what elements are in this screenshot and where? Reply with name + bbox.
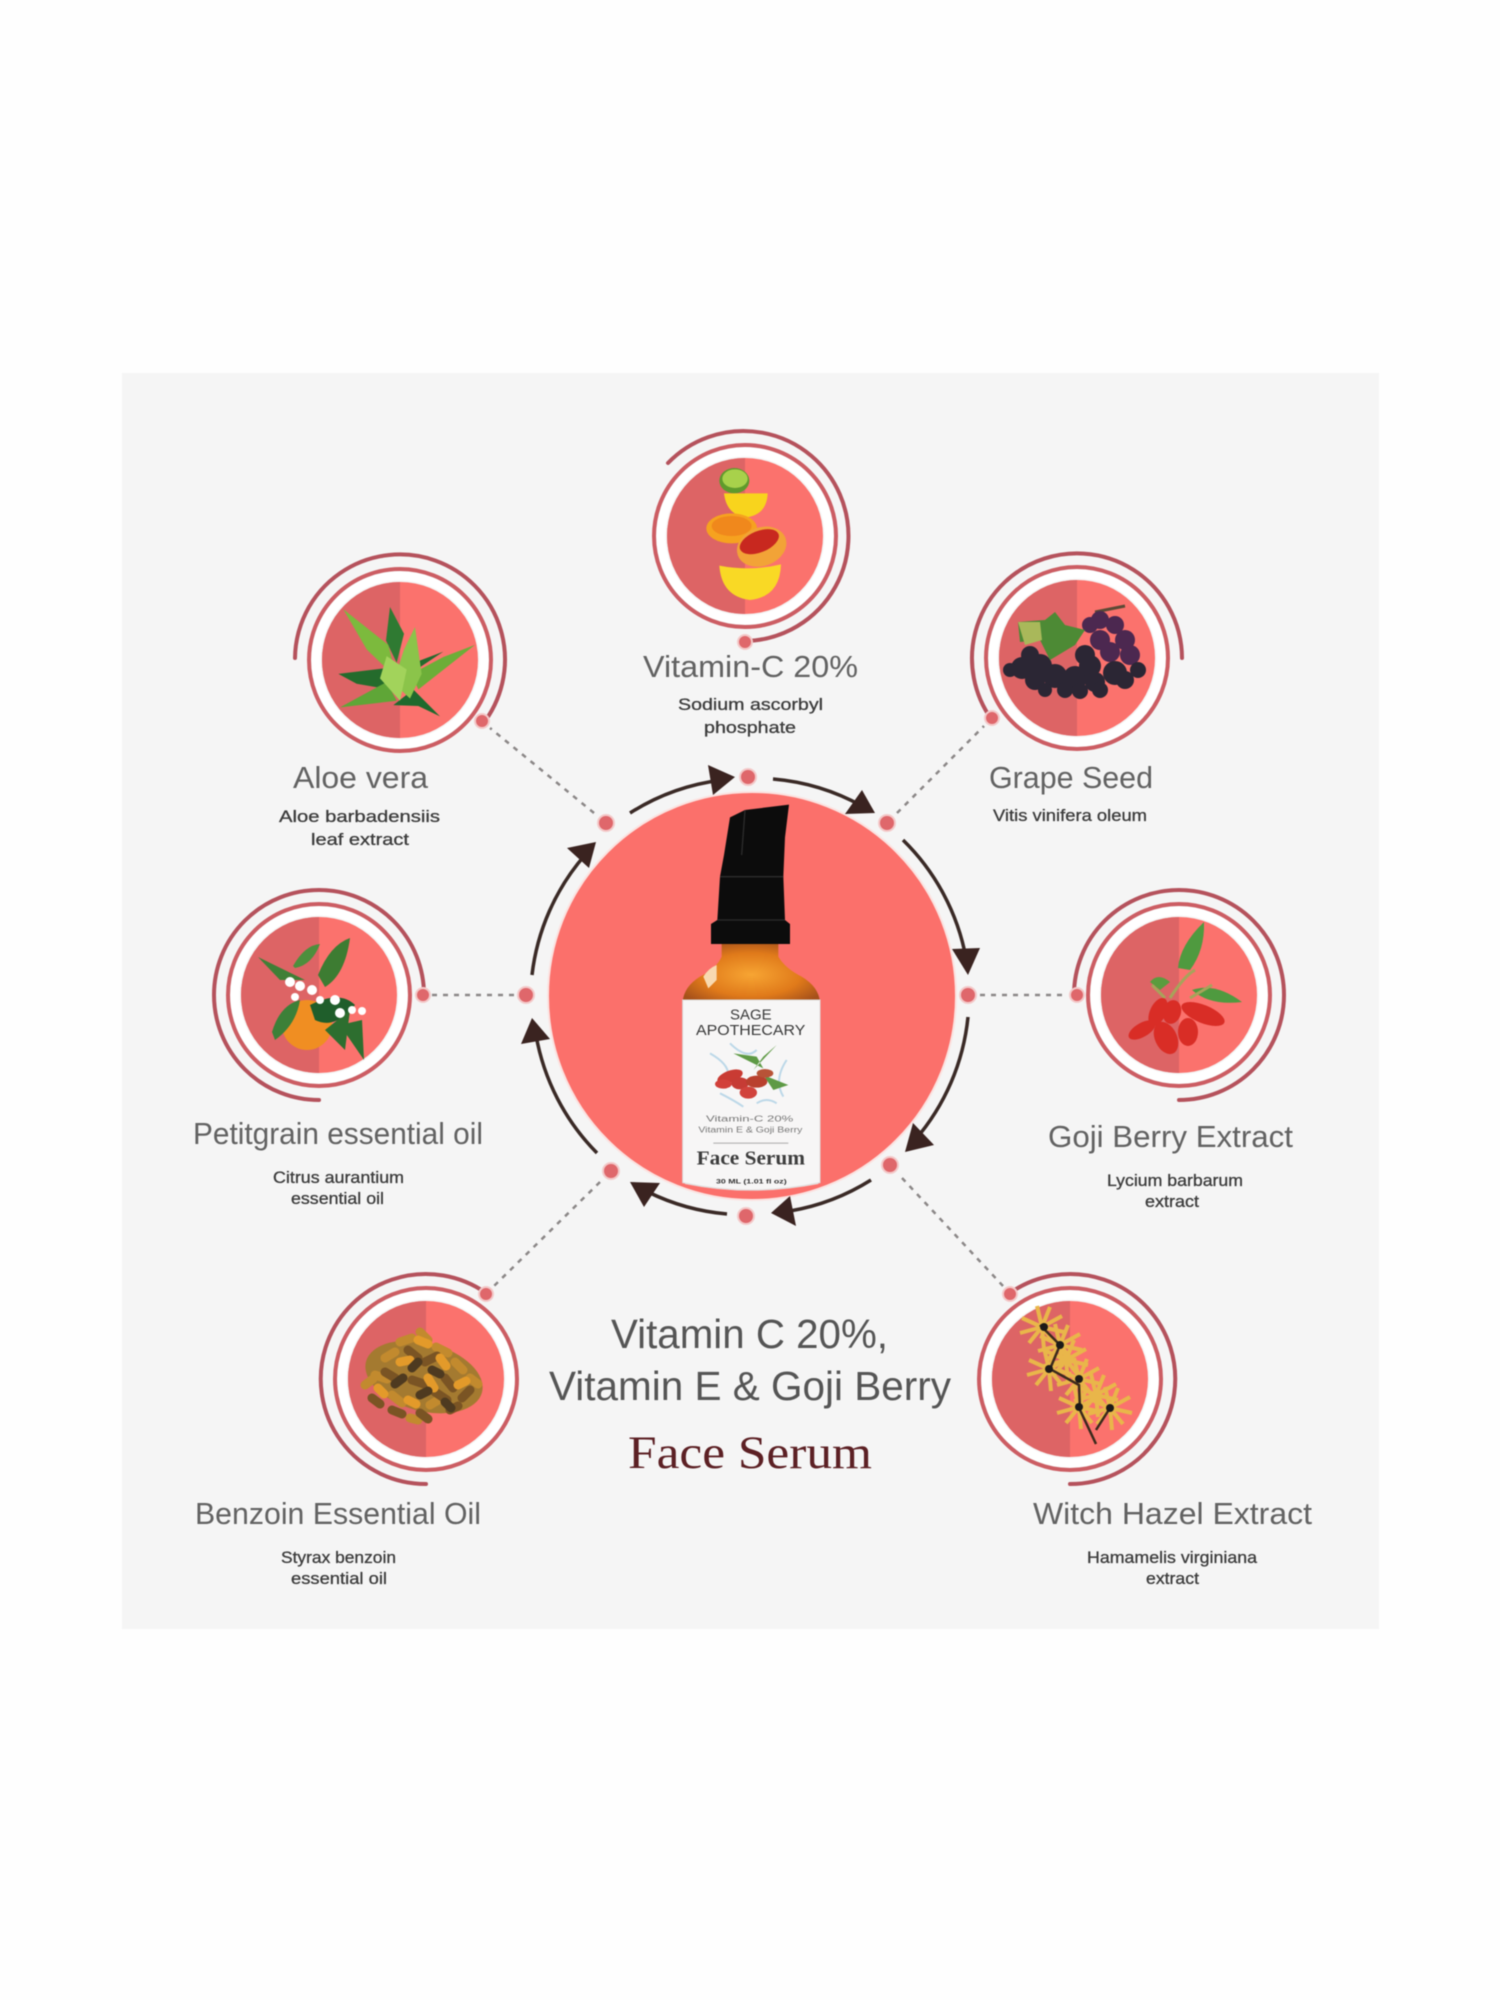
- label: Goji Berry Extract: Goji Berry Extract: [1048, 1119, 1293, 1154]
- medallion: benzoin: [321, 1274, 517, 1484]
- sublabel: phosphate: [704, 719, 796, 737]
- sublabel: Styrax benzoin: [281, 1549, 396, 1567]
- sublabel: [273, 1169, 404, 1208]
- sublabel: essential oil: [291, 1570, 387, 1588]
- sublabel: [1107, 1172, 1243, 1211]
- serum bottle: APOTHECARY: [696, 1023, 806, 1039]
- ingredient: Witch Hazel Extract: [979, 1274, 1312, 1588]
- sublabel: essential oil: [291, 1190, 384, 1208]
- icon: benzoin resin chips: [357, 1329, 491, 1425]
- ingredient: Petitgrain essential oil: [193, 890, 483, 1208]
- label: Benzoin Essential Oil: Benzoin Essential Oil: [195, 1496, 481, 1531]
- ingredient: Vitamin-C: [643, 431, 858, 737]
- serum bottle: SAGE: [730, 1007, 772, 1023]
- icon: stacked citrus: [706, 468, 792, 600]
- sublabel: [1087, 1549, 1258, 1588]
- medallion: petitgrain: [214, 890, 430, 1100]
- title line 2: Vitamin E & Goji Berry: [549, 1363, 951, 1409]
- label: Grape Seed: Grape Seed: [989, 760, 1153, 795]
- icon: orange branch: [258, 938, 366, 1060]
- sublabel: [279, 808, 440, 849]
- product title: [549, 1311, 951, 1479]
- sublabel: Aloe barbadensiis: [279, 808, 440, 826]
- medallion: grape: [972, 553, 1182, 749]
- background panel: [122, 373, 1379, 1629]
- icon: grapes: [1003, 606, 1146, 699]
- icon: goji berries: [1126, 922, 1242, 1058]
- medallion: aloe: [295, 554, 505, 751]
- central hub: [518, 765, 980, 1226]
- sublabel: Hamamelis virginiana: [1087, 1549, 1258, 1567]
- cycle arrows: [521, 765, 980, 1226]
- title line 3: Face Serum: [628, 1427, 872, 1479]
- serum bottle: Vitamin-C 20%: [706, 1114, 793, 1123]
- medallion: citrus stack: [654, 431, 848, 649]
- ingredient: Benzoin Essential Oil: [195, 1274, 517, 1588]
- sublabel: extract: [1145, 1193, 1199, 1211]
- label: Petitgrain essential oil: Petitgrain essential oil: [193, 1116, 483, 1151]
- large coral circle: [548, 792, 956, 1200]
- sublabel: Vitis vinifera oleum: [993, 807, 1147, 825]
- icon: witch hazel branch: [1020, 1306, 1132, 1444]
- dashed connectors: [432, 726, 1068, 1286]
- serum bottle: 30 ML (1.01 fl oz): [716, 1178, 787, 1185]
- sublabel: extract: [1146, 1570, 1199, 1588]
- sublabel: Lycium barbarum: [1107, 1172, 1243, 1190]
- sublabel: [281, 1549, 396, 1588]
- medallion: goji: [1070, 890, 1284, 1100]
- ingredient: Goji Berry Extract: [1048, 890, 1293, 1211]
- hub connection dots: [518, 769, 976, 1224]
- sublabel: [678, 696, 823, 737]
- title line 1: Vitamin C 20%,: [611, 1311, 888, 1357]
- serum bottle: Face Serum: [697, 1147, 805, 1169]
- label: Aloe vera: Aloe vera: [293, 760, 429, 795]
- medallion: witch hazel: [979, 1274, 1175, 1484]
- label: Vitamin-C 20%: Vitamin-C 20%: [643, 649, 858, 684]
- icon: aloe plant: [338, 607, 475, 716]
- label: Witch Hazel Extract: Witch Hazel Extract: [1033, 1496, 1312, 1531]
- sublabel: Sodium ascorbyl: [678, 696, 823, 714]
- serum bottle: Vitamin E & Goji Berry: [698, 1126, 802, 1135]
- ingredient: Grape Seed: [972, 553, 1182, 825]
- serum bottle: [683, 805, 820, 1191]
- sublabel: leaf extract: [311, 831, 409, 849]
- sublabel: Citrus aurantium: [273, 1169, 404, 1187]
- ingredient: Aloe vera: [279, 554, 505, 849]
